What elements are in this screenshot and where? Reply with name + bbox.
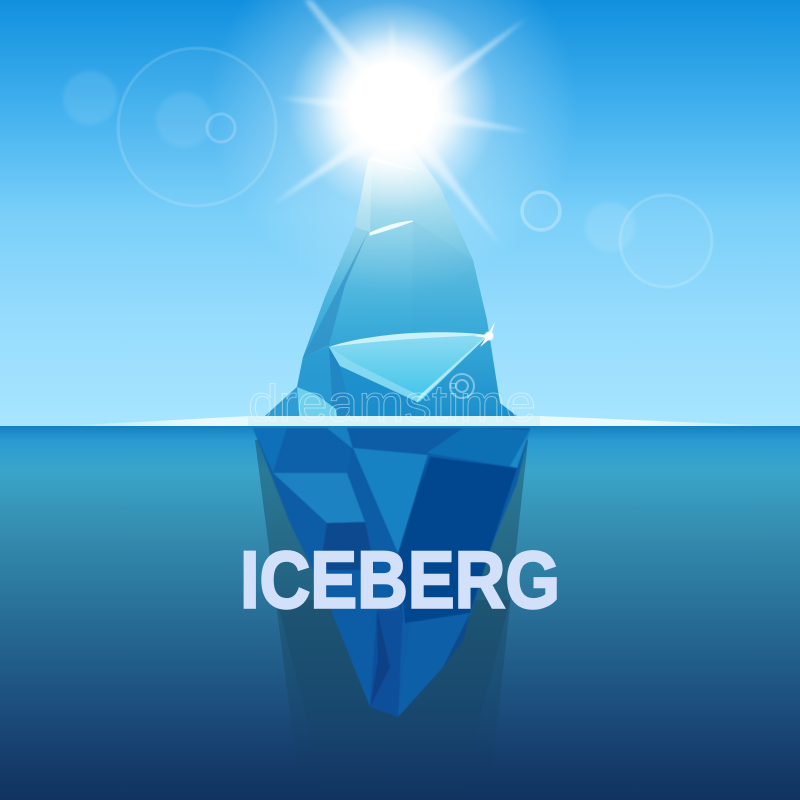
dark crevice facet <box>303 232 368 357</box>
iceberg underwater <box>253 428 530 717</box>
sparkle <box>474 322 495 347</box>
sun rays <box>272 0 530 245</box>
iceberg shadow in water <box>255 440 528 800</box>
central dark crease <box>398 455 428 620</box>
iceberg above water <box>265 135 517 416</box>
sun <box>288 1 498 211</box>
small foot block <box>297 387 337 416</box>
lens flares <box>63 48 712 287</box>
lower right facet <box>398 613 470 717</box>
crystal ledge <box>329 334 488 402</box>
sun glow <box>208 0 578 293</box>
top band facets <box>327 428 353 449</box>
right shade facet <box>412 220 487 332</box>
top left facet <box>253 428 287 473</box>
title: ICEBERG <box>240 536 560 626</box>
watermark: dreamstime <box>248 375 536 433</box>
central bright facet <box>353 448 428 553</box>
lower shaded facet <box>297 347 340 405</box>
watermark spiral logo <box>450 374 474 398</box>
right big dark facet <box>400 457 517 623</box>
sky background <box>0 0 800 427</box>
ledge highlights <box>329 332 488 347</box>
snow highlights on peak <box>370 221 413 235</box>
bottom centre strip <box>370 610 403 717</box>
horizon ice line <box>60 416 780 426</box>
sea background <box>0 426 800 800</box>
bottom dark crease <box>370 610 390 707</box>
left bright facet <box>273 473 365 523</box>
left dark facets <box>273 477 327 583</box>
